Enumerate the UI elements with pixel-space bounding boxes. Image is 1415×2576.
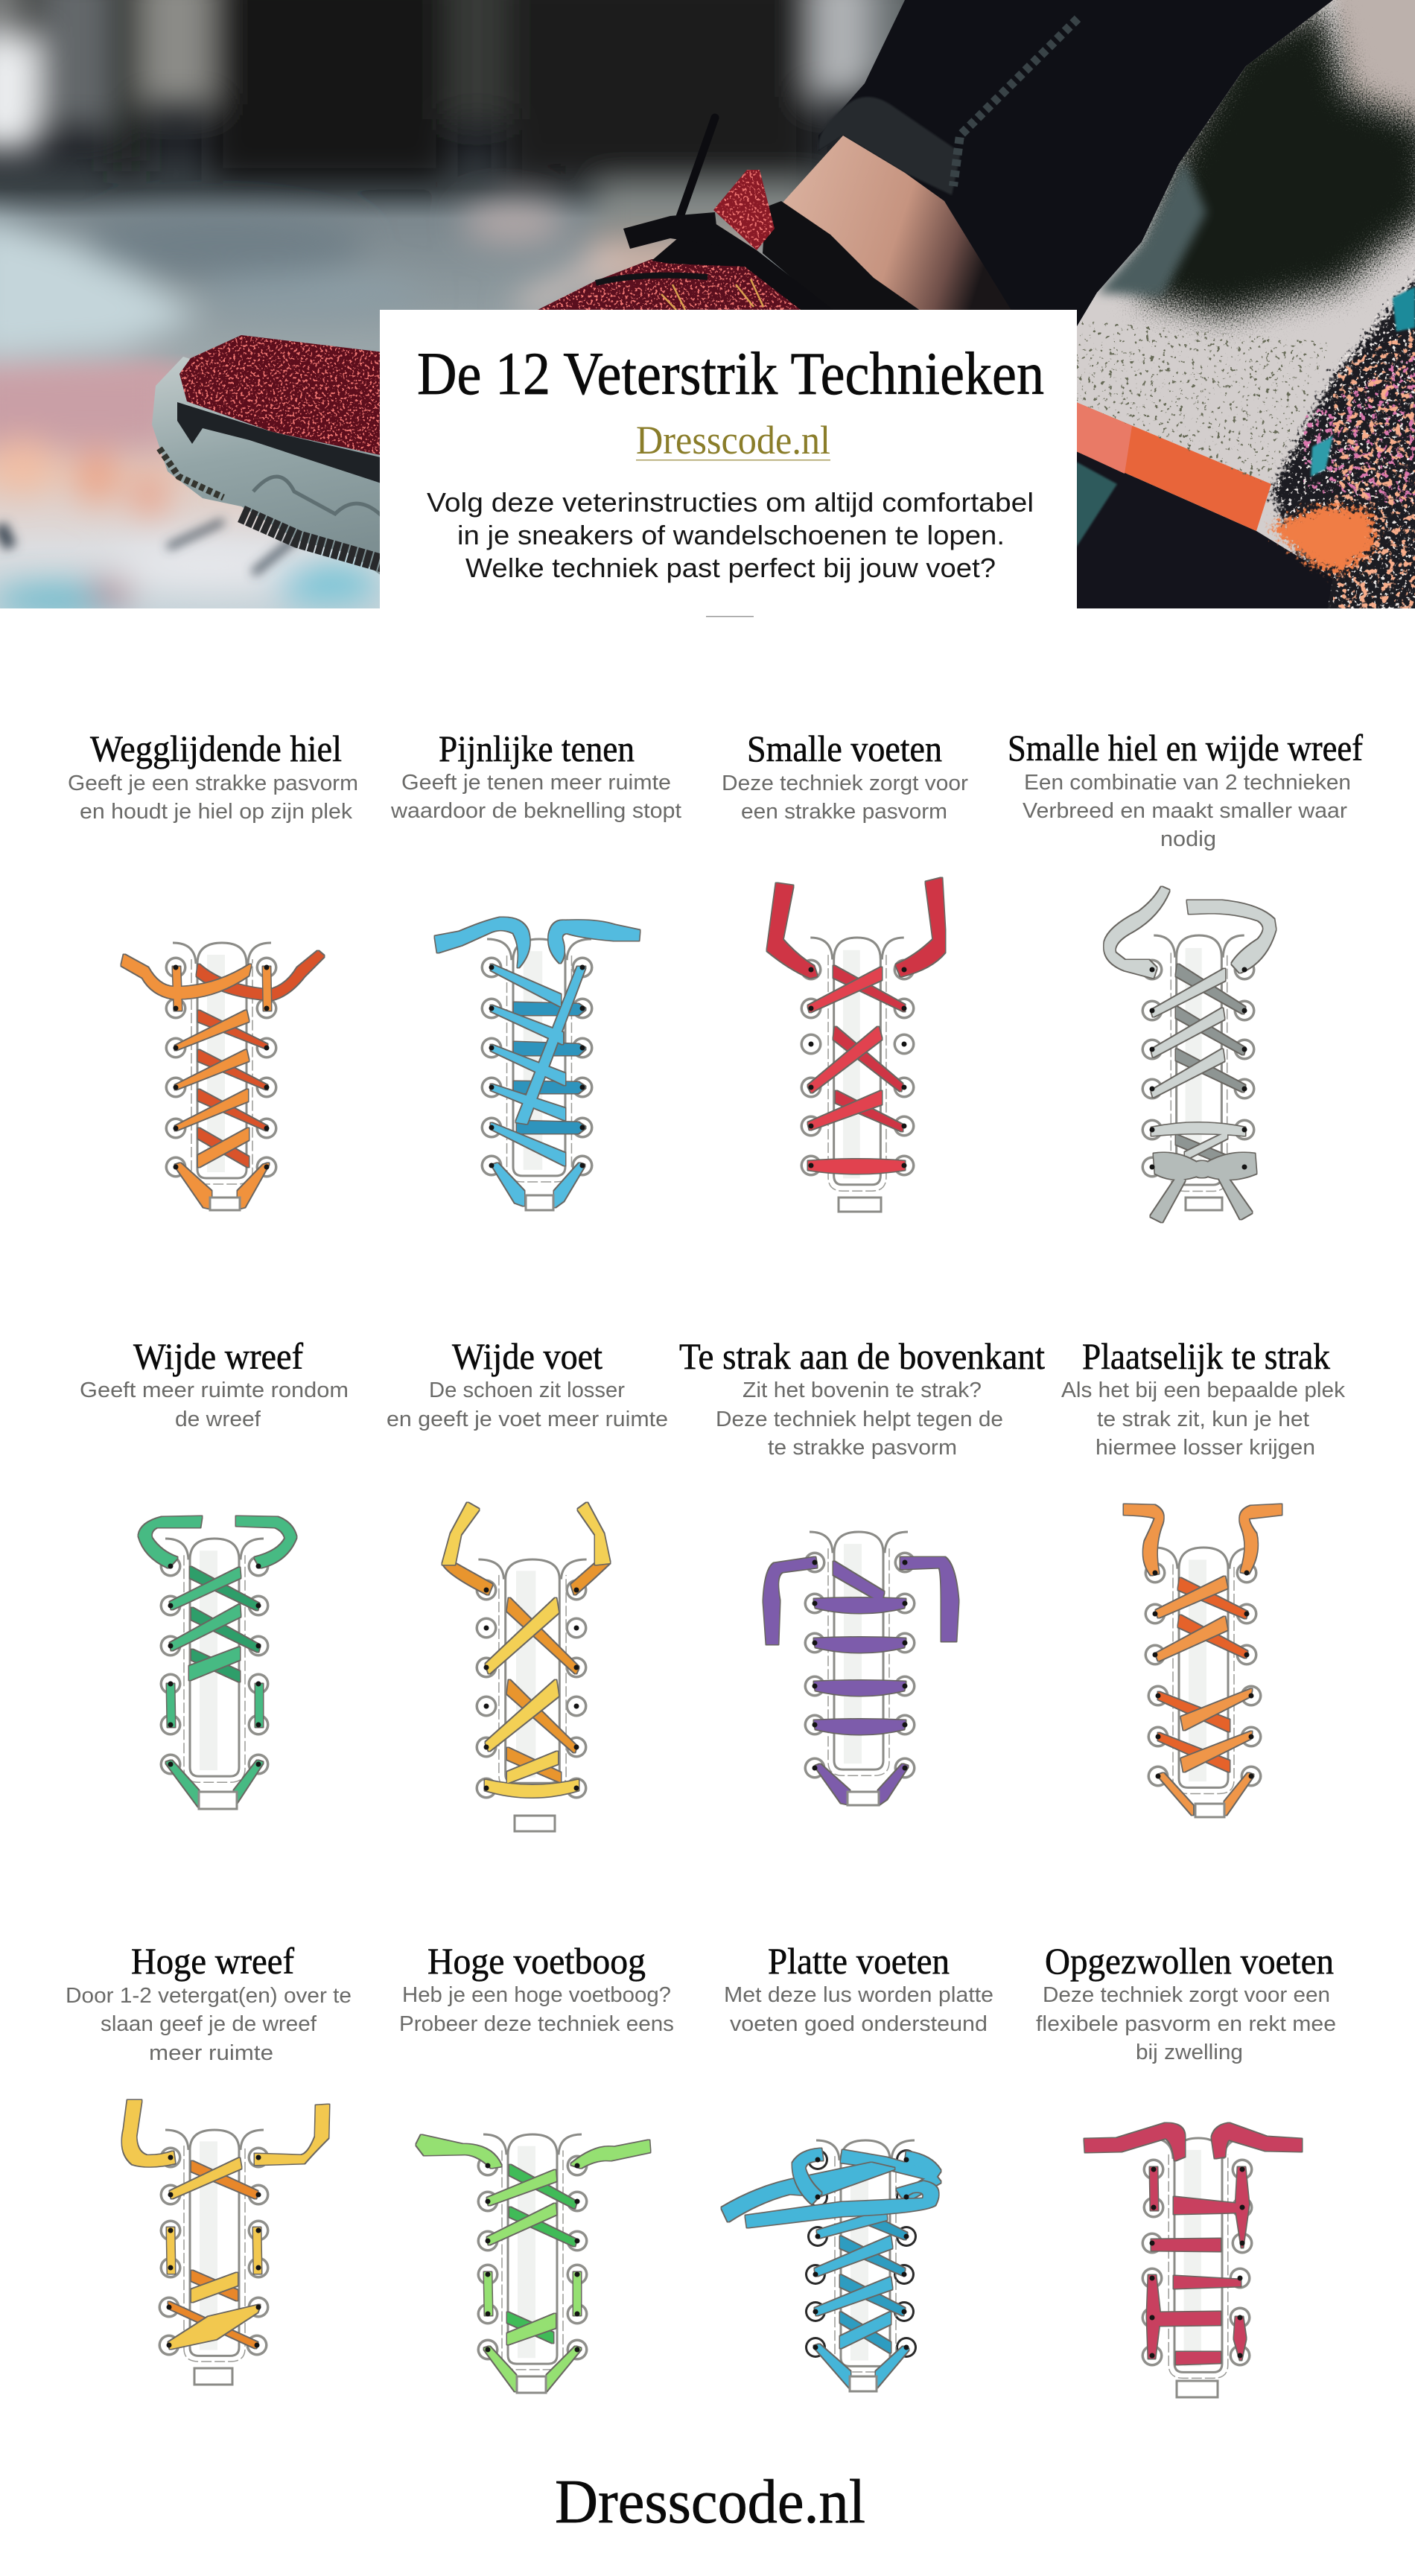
lacing diagram: green (139, 1517, 296, 1809)
description: een strakke pasvorm (741, 800, 947, 824)
description: Geeft je een strakke pasvorm (68, 772, 358, 795)
description (724, 1983, 993, 2036)
panel: Smalle voeten (722, 728, 968, 1212)
description (66, 1984, 352, 2065)
orange stripe and dark base (1076, 451, 1333, 618)
description: Verbreed en maakt smaller waar (1023, 799, 1347, 823)
description: Geeft meer ruimte rondom (80, 1378, 349, 1402)
lacing diagram: blue with loops (722, 2140, 940, 2391)
heading: Pijnlijke tenen (439, 728, 635, 769)
description: hiermee losser krijgen (1096, 1436, 1315, 1460)
lacing diagram: crimson (1085, 2124, 1301, 2397)
brand link: Dresscode.nl (636, 418, 830, 462)
description: Zit het bovenin te strak? (743, 1378, 982, 1402)
description: Probeer deze techniek eens (399, 2012, 674, 2036)
description (722, 772, 968, 824)
description: Deze techniek helpt tegen de (716, 1408, 1003, 1431)
panel: Plaatselijk te strak (1061, 1335, 1346, 1817)
bow (1151, 1154, 1256, 1221)
description: de wreef (175, 1408, 261, 1431)
heading: Wijde voet (452, 1335, 602, 1377)
description: en houdt je hiel op zijn plek (80, 800, 353, 824)
sneaker toe and sole (152, 335, 384, 577)
lacing diagram: orange (122, 943, 323, 1210)
intro text: Welke techniek past perfect bij jouw voet? (465, 553, 996, 583)
panel: Hoge voetboog (399, 1940, 674, 2393)
description: voeten goed ondersteund (730, 2012, 988, 2036)
panel: Wijde wreef (80, 1335, 349, 1809)
intro text: in je sneakers of wandelschoenen te lopen. (457, 520, 1005, 550)
description: Heb je een hoge voetboog? (402, 1983, 671, 2007)
panel: Wegglijdende hiel (68, 728, 358, 1210)
description: Geeft je tenen meer ruimte (401, 771, 671, 795)
description: flexibele pasvorm en rekt mee (1036, 2012, 1336, 2036)
description: nodig (1160, 827, 1216, 851)
panel: Te strak aan de bovenkant (679, 1335, 1045, 1805)
intro text (427, 487, 1034, 583)
description: Een combinatie van 2 technieken (1024, 771, 1351, 795)
description (716, 1378, 1003, 1460)
heading: Wijde wreef (133, 1335, 303, 1377)
panel: Wijde voet (387, 1335, 668, 1831)
heading: Smalle hiel en wijde wreef (1008, 727, 1363, 769)
description: waardoor de beknelling stopt (390, 799, 681, 823)
description: Deze techniek zorgt voor (722, 772, 968, 795)
description: Met deze lus worden platte (724, 1983, 993, 2007)
lacing diagram: yellow (443, 1504, 609, 1831)
lacing diagram: golden yellow (123, 2101, 328, 2385)
sneaker upper and laces (538, 118, 833, 313)
description: meer ruimte (149, 2041, 273, 2065)
description: te strak zit, kun je het (1097, 1408, 1309, 1431)
ankle and sock (763, 136, 1013, 313)
panel: Platte voeten (722, 1940, 993, 2391)
lacing diagram: purple (764, 1532, 958, 1805)
heading: Platte voeten (768, 1940, 950, 1982)
lacing diagram: red (768, 879, 944, 1212)
description: bij zwelling (1136, 2041, 1243, 2064)
lacing diagram: blue (436, 918, 639, 1210)
header panel (380, 310, 1077, 608)
description: Door 1-2 vetergat(en) over te (66, 1984, 352, 2008)
description (390, 771, 681, 823)
description: te strakke pasvorm (768, 1436, 957, 1460)
heading: Smalle voeten (747, 728, 942, 769)
heading: Hoge wreef (131, 1940, 294, 1982)
footer brand: Dresscode.nl (555, 2467, 865, 2537)
panel: Smalle hiel en wijde wreef (1008, 727, 1363, 1221)
lacing diagram: orange (1125, 1505, 1281, 1817)
blurred background scenery (0, 0, 968, 613)
description: Deze techniek zorgt voor een (1043, 1983, 1330, 2007)
heading: Opgezwollen voeten (1045, 1940, 1334, 1982)
hero photo: sneaker on a wall (0, 0, 1415, 618)
description (1023, 771, 1351, 851)
intro text: Volg deze veterinstructies om altijd comfortabel (427, 487, 1034, 518)
title: De 12 Veterstrik Technieken (417, 340, 1044, 407)
panel: Pijnlijke tenen (390, 728, 681, 1210)
heading: Hoge voetboog (427, 1940, 646, 1982)
description: Als het bij een bepaalde plek (1061, 1378, 1346, 1402)
description: en geeft je voet meer ruimte (387, 1408, 668, 1431)
description (68, 772, 358, 824)
lacing diagram: grey (1105, 888, 1275, 1221)
description (387, 1378, 668, 1431)
description: De schoen zit losser (429, 1378, 625, 1402)
painted concrete wall (1072, 0, 1415, 618)
description (1036, 1983, 1336, 2064)
heading: Te strak aan de bovenkant (679, 1335, 1045, 1377)
description: slaan geef je de wreef (101, 2012, 317, 2036)
lacing diagram: light green (417, 2134, 649, 2393)
description (1061, 1378, 1346, 1460)
heading: Plaatselijk te strak (1082, 1335, 1330, 1377)
jeans (818, 0, 1341, 328)
panel: Opgezwollen voeten (1036, 1940, 1336, 2397)
heading: Wegglijdende hiel (90, 728, 342, 769)
paint splatter area (1271, 273, 1415, 618)
description (399, 1983, 674, 2036)
panel: Hoge wreef (66, 1940, 352, 2385)
description (80, 1378, 349, 1431)
